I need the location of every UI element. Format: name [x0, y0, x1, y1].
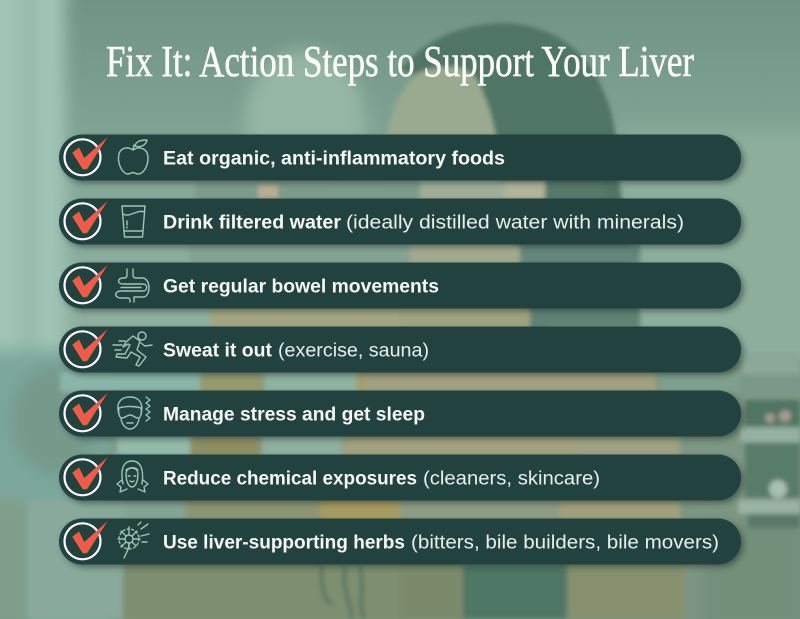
gap row1-2 — [195, 180, 420, 200]
row 4: sweat it out: (exercise, sauna) — [278, 340, 429, 362]
row 5: manage stress — [59, 390, 741, 436]
gap row4-5 — [60, 372, 200, 392]
shelf — [742, 352, 800, 374]
row 2: drink filtered water — [59, 198, 741, 244]
face — [384, 66, 505, 200]
gap row5-6 — [117, 436, 190, 456]
row 4: sweat it out: Sweat it out — [163, 340, 273, 362]
icon: runner — [113, 332, 152, 366]
below — [115, 564, 400, 619]
icon: sleep mask — [118, 397, 150, 429]
row 1: eat organic: Eat organic, anti-inflammatory foods — [163, 148, 505, 170]
row 6: chemical exposures: Reduce chemical exposures — [163, 468, 417, 490]
row 4: sweat it out — [59, 326, 741, 372]
icon: apple — [118, 140, 148, 174]
row 3: bowel movements — [59, 262, 741, 308]
row 7: liver-supporting herbs — [59, 518, 741, 564]
gap row2-3 — [190, 244, 410, 264]
row 1: eat organic — [59, 134, 741, 180]
hair — [400, 23, 640, 330]
icon: face with skincare sparkles — [117, 461, 148, 492]
row 2: drink filtered water: (ideally distilled water with minerals) — [346, 212, 684, 234]
row 5: manage stress: Manage stress and get sleep — [163, 404, 425, 426]
icon: glass of water — [122, 206, 145, 237]
row 7: liver-supporting herbs: Use liver-supporting herbs — [163, 532, 405, 554]
row 6: chemical exposures: (cleaners, skincare) — [423, 468, 600, 490]
row 3: bowel movements: Get regular bowel movements — [163, 276, 439, 298]
icon: intestines — [116, 269, 149, 302]
row 6: chemical exposures — [59, 454, 741, 500]
gap row3-4 — [210, 308, 400, 328]
gap row6-7 — [120, 500, 185, 520]
icon: dandelion — [118, 522, 149, 558]
row 7: liver-supporting herbs: (bitters, bile builders, bile movers) — [411, 532, 719, 554]
row 2: drink filtered water: Drink filtered water — [163, 212, 342, 234]
